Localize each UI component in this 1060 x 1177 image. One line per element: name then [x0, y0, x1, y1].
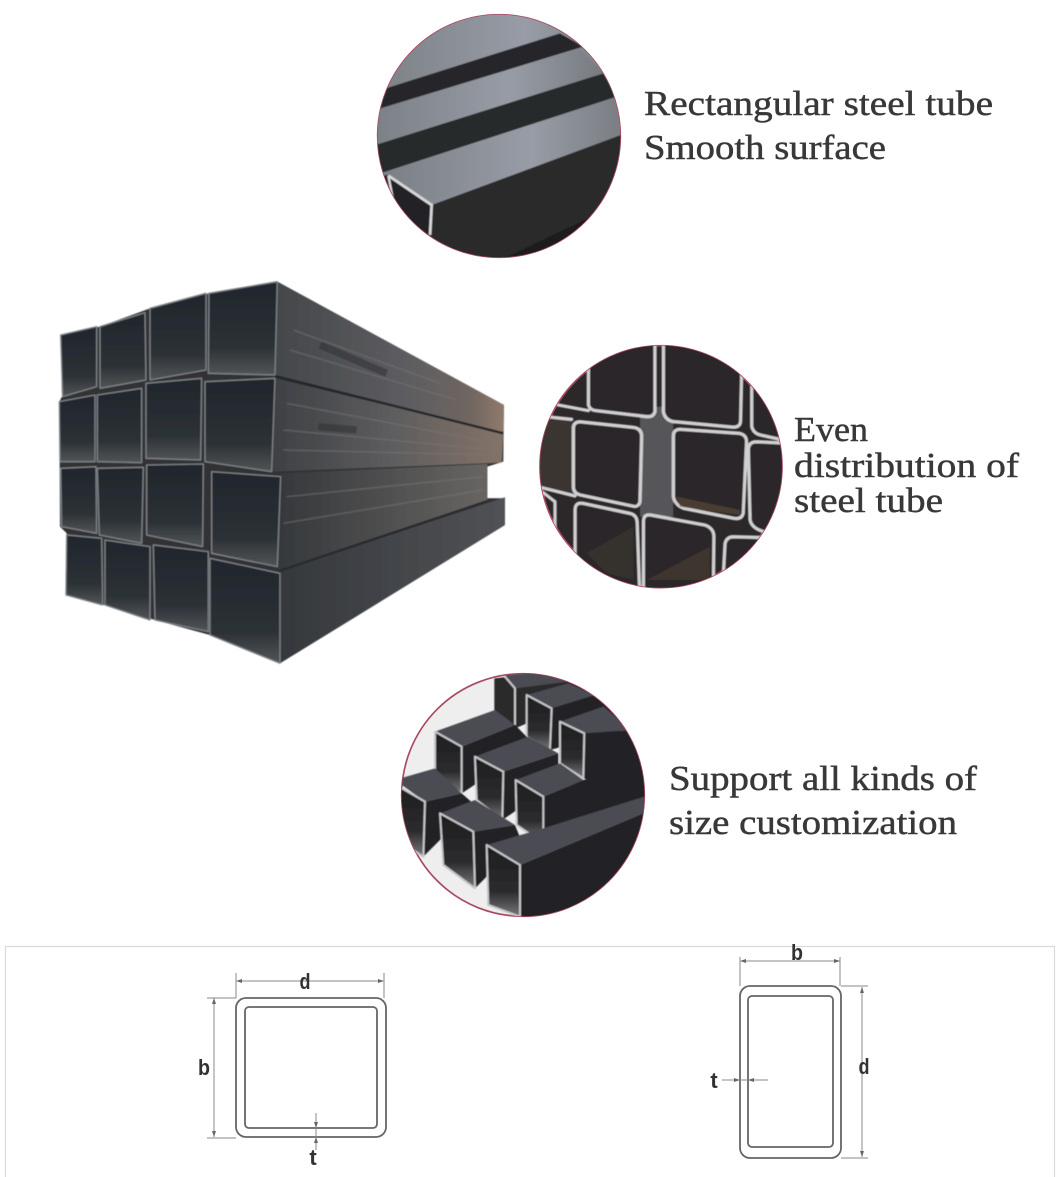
caption: rectangular steel tube, smooth surface: Smooth surface: [644, 128, 886, 167]
diagram: tall tube section: d: [858, 1054, 870, 1079]
back row of tube openings: [59, 293, 208, 632]
tube openings: [540, 340, 790, 600]
caption: size customization: Support all kinds of: [669, 759, 977, 798]
detail circle: tube sizes: [395, 672, 655, 925]
caption: even distribution: steel tube: [794, 481, 943, 520]
panel: cross-section dimension diagrams: [6, 940, 1054, 1177]
detail circle: smooth surface: [376, 14, 622, 258]
diagram: wide tube section: b: [198, 1055, 210, 1080]
caption: rectangular steel tube, smooth surface: Rectangular steel tube: [644, 84, 993, 123]
tube surfaces: [378, 14, 620, 258]
caption: even distribution: distribution of: [794, 446, 1019, 485]
diagram: tall tube section: [710, 940, 870, 1158]
diagram: wide tube section: [198, 969, 386, 1170]
caption: size customization: size customization: [669, 803, 957, 842]
caption: even distribution: Even: [794, 410, 868, 449]
assorted tubes: [402, 674, 644, 916]
tube side faces: [272, 282, 505, 663]
diagram: wide tube section: t: [309, 1145, 317, 1170]
caption: size customization: [669, 759, 977, 842]
caption: rectangular steel tube, smooth surface: [644, 84, 993, 167]
front column of tube openings: [205, 282, 281, 663]
main photo: stack of rectangular steel tubes: [59, 282, 505, 663]
diagram: tall tube section: t: [710, 1068, 718, 1093]
detail circle: tube ends: [540, 340, 790, 600]
diagram: wide tube section: d: [300, 969, 310, 994]
caption: even distribution: [794, 410, 1019, 520]
dark backing silhouette of the stack: [59, 282, 505, 663]
diagram: tall tube section: b: [791, 940, 803, 965]
